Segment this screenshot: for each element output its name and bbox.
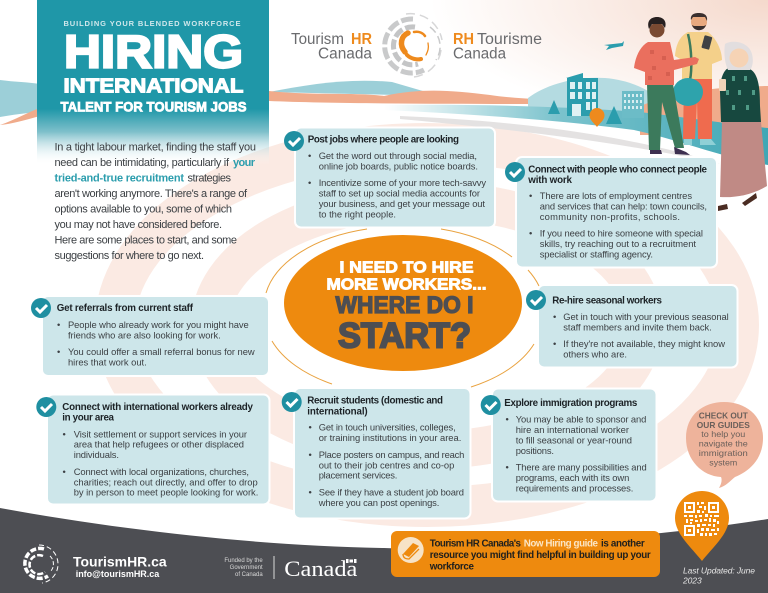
panel: recruit students: Place posters on campus, and reach xyxy=(319,449,464,460)
logo: Tourism HR Canada: Canada xyxy=(318,46,372,63)
callout: check out our guides: navigate the xyxy=(699,438,748,448)
callout: check out our guides: immigration xyxy=(699,448,748,458)
intro paragraph: need can be intimidating, particularly if xyxy=(54,157,230,169)
panel: re-hire seasonal workers xyxy=(526,285,738,368)
header kicker: BUILDING YOUR BLENDED WORKFORCE xyxy=(64,19,240,28)
panel: connect with people: There are lots of employment centres xyxy=(540,190,692,201)
icon: check xyxy=(481,395,501,415)
panel: explore immigration: • xyxy=(506,414,509,425)
panel: referrals: People who already work for you might have xyxy=(68,319,249,330)
callout: check out our guides xyxy=(686,402,763,488)
panel: recruit students: • xyxy=(308,449,312,460)
panel: referrals: You could offer a small referral bonus for new xyxy=(68,346,255,357)
central oval: START? xyxy=(338,316,471,356)
panel: explore immigration xyxy=(481,388,656,502)
icon: check xyxy=(526,290,546,310)
panel: post jobs: to the right people. xyxy=(319,208,396,220)
banner: now hiring guide: is another xyxy=(601,538,645,550)
panel: post jobs: online job boards, public notice boards. xyxy=(319,160,478,172)
panel: connect with people: community non-profits, schools. xyxy=(540,211,680,222)
last updated note: Last Updated: June xyxy=(683,566,755,576)
icon: white logo mark xyxy=(25,545,58,583)
panel: connect with people: specialist or staffing agency. xyxy=(540,249,653,260)
panel: post jobs: Incentivize some of your more tech-savvy xyxy=(319,177,486,188)
footer band xyxy=(0,508,768,593)
panel: explore immigration: requirements and processes. xyxy=(516,483,633,494)
panel: recruit students: See if they have a student job board xyxy=(319,487,464,498)
panel: explore immigration: programs, each with its own xyxy=(516,472,629,483)
icon: check xyxy=(505,162,525,182)
panel: referrals xyxy=(31,296,269,376)
icon: teal building xyxy=(566,73,598,116)
panel: post jobs: staff to set up social media accounts for xyxy=(319,188,480,198)
icon: check xyxy=(31,298,51,318)
central question: I NEED TO HIRE xyxy=(340,260,474,276)
panel: re-hire seasonal workers: If they're not available, they might know xyxy=(563,338,725,349)
intro paragraph: tried-and-true recruitment xyxy=(54,172,184,184)
footer logo and contact xyxy=(25,545,167,583)
panel: connect with people xyxy=(505,157,717,268)
panel: explore immigration: Explore immigration programs xyxy=(504,398,638,409)
panel: post jobs: your business, and get your message out xyxy=(319,198,485,209)
logo: Tourism HR Canada: HR xyxy=(351,31,372,48)
panel: connect with people: skills, try reaching out to a recruitment xyxy=(540,238,696,249)
panel: recruit students: Recruit students (domestic and xyxy=(307,396,443,406)
footer logo and contact: info@tourismHR.ca xyxy=(76,569,160,579)
panel: explore immigration: positions. xyxy=(516,445,554,456)
panel: recruit students: Get in touch universities, colleges, xyxy=(319,422,456,433)
footer logo and contact: TourismHR.ca xyxy=(73,554,167,570)
panel: post jobs: Get the word out through social media, xyxy=(319,150,477,161)
panel: connect with people: • xyxy=(529,190,532,201)
panel: recruit students: where you can post openings. xyxy=(318,497,439,508)
connector ring around central oval xyxy=(266,229,539,387)
panel: international workers: by in person to meet people looking for work. xyxy=(74,487,258,498)
panel: connect with people: • xyxy=(529,228,532,239)
logo: Tourism HR Canada: RH xyxy=(453,31,474,48)
icon: light building xyxy=(622,91,644,118)
government of Canada wordmark xyxy=(224,556,358,581)
intro paragraph xyxy=(54,142,256,262)
title xyxy=(60,26,246,114)
panel: referrals: hires that work out. xyxy=(68,356,147,367)
panel: explore immigration: • xyxy=(506,462,509,473)
panel: connect with people: Connect with people who connect people xyxy=(528,164,708,176)
icon: book xyxy=(398,537,424,563)
logo: Tourism HR Canada: Tourisme xyxy=(477,31,542,48)
panel: international workers: • xyxy=(62,428,66,439)
panel: international workers xyxy=(36,394,269,504)
icon: check xyxy=(284,131,304,151)
panel: post jobs: Post jobs where people are looking xyxy=(308,134,459,146)
panel: explore immigration: hire an international worker xyxy=(516,424,629,435)
panel: referrals: • xyxy=(57,346,60,357)
icon: check xyxy=(282,392,302,412)
central oval: WHERE DO I xyxy=(336,292,474,319)
government of Canada wordmark: Canada xyxy=(284,556,358,581)
intro paragraph: In a tight labour market, finding the staff you xyxy=(54,142,256,154)
panel: referrals: Get referrals from current staff xyxy=(57,303,194,314)
title: INTERNATIONAL xyxy=(64,74,244,98)
intro paragraph: options available to you, some of which xyxy=(54,204,232,216)
intro paragraph: strategies xyxy=(188,172,232,184)
panel: re-hire seasonal workers: others who are. xyxy=(563,348,627,360)
panel: re-hire seasonal workers: • xyxy=(553,311,556,322)
panel: recruit students: • xyxy=(308,422,312,433)
panel: international workers: • xyxy=(62,466,66,477)
intro paragraph: your xyxy=(233,157,256,169)
callout: check out our guides: OUR GUIDES xyxy=(697,420,750,430)
illustration: woman in coral sweater xyxy=(634,17,699,155)
icon: check xyxy=(36,397,56,417)
panel: international workers: area that help refugees or other displaced xyxy=(74,439,244,450)
central oval xyxy=(284,235,522,371)
QR pin xyxy=(675,491,729,561)
government of Canada wordmark: Government xyxy=(230,565,263,571)
banner: now hiring guide xyxy=(391,531,660,577)
last updated note xyxy=(682,566,755,586)
QR code xyxy=(684,502,719,536)
title: HIRING xyxy=(64,26,243,78)
callout: check out our guides: to help you xyxy=(701,429,746,439)
logo: Tourism HR Canada xyxy=(291,14,542,77)
last updated note: 2023 xyxy=(682,576,702,586)
panel: re-hire seasonal workers: Re-hire seasonal workers xyxy=(552,296,663,306)
panel: connect with people: If you need to hire someone with special xyxy=(540,228,703,239)
icon: location pin xyxy=(590,108,604,127)
panel: recruit students: • xyxy=(308,487,312,498)
background sky and rings xyxy=(115,0,768,507)
panel: post jobs: • xyxy=(308,150,311,161)
logo: Tourism HR Canada: Tourism xyxy=(291,31,344,48)
landscape waves xyxy=(0,78,768,165)
panel: post jobs xyxy=(284,128,495,228)
government of Canada wordmark: of Canada xyxy=(235,572,263,578)
logo: Tourism HR Canada: Canada xyxy=(453,46,506,63)
panel: recruit students: or training institutions in your area. xyxy=(319,432,461,443)
intro paragraph: Here are some places to start, and some xyxy=(54,234,237,246)
logo mark xyxy=(385,14,442,77)
banner: now hiring guide: Now Hiring guide xyxy=(524,538,599,550)
illustration: man xyxy=(673,13,722,145)
panel: recruit students xyxy=(282,388,470,518)
panel: referrals: • xyxy=(57,319,60,330)
panel: re-hire seasonal workers: Get in touch with your previous seasonal xyxy=(563,311,729,322)
banner: now hiring guide: resource you might find helpful in building up your xyxy=(430,550,651,561)
panel: recruit students: placement services. xyxy=(319,470,397,481)
panel: connect with people: and services that can help: town councils, xyxy=(540,201,707,212)
panel: re-hire seasonal workers: • xyxy=(553,338,556,349)
panel: international workers: in your area xyxy=(62,412,115,423)
callout: check out our guides: CHECK OUT xyxy=(699,410,749,420)
intro paragraph: suggestions for where to go next. xyxy=(54,250,204,262)
panel: international workers: Visit settlement or support services in your xyxy=(74,428,247,439)
panel: post jobs: • xyxy=(308,177,311,188)
panel: recruit students: out to their job centres and co-op xyxy=(319,459,454,470)
illustration: older woman xyxy=(718,42,767,211)
panel: explore immigration: You may be able to sponsor and xyxy=(516,414,646,425)
icon: trees xyxy=(548,100,622,124)
panel: referrals: friends who are also looking for work. xyxy=(68,329,221,340)
central oval: MORE WORKERS... xyxy=(326,276,486,294)
panel: international workers: Connect with local organizations, churches, xyxy=(74,466,249,477)
panel: recruit students: international) xyxy=(307,406,368,418)
title: TALENT FOR TOURISM JOBS xyxy=(60,98,246,114)
callout: check out our guides: system xyxy=(709,458,737,468)
government of Canada wordmark: Funded by the xyxy=(224,558,263,564)
banner: now hiring guide: Tourism HR Canada's xyxy=(430,538,522,550)
icon: plane xyxy=(604,41,624,50)
panel: explore immigration: There are many possibilities and xyxy=(516,462,647,473)
city illustration xyxy=(548,73,644,127)
header panel xyxy=(37,0,269,165)
panel: international workers: charities; reach out directly, and offer to drop xyxy=(74,476,258,487)
intro paragraph: you may not have considered before. xyxy=(54,219,222,231)
panel: international workers: Connect with international workers already xyxy=(62,402,254,413)
panel: international workers: individuals. xyxy=(74,449,119,460)
intro paragraph: aren't working anymore. There's a range of xyxy=(54,188,248,200)
panel: connect with people: with work xyxy=(527,175,573,186)
panel: explore immigration: to fill seasonal or year-round xyxy=(516,434,632,445)
banner: now hiring guide: workforce xyxy=(429,562,475,572)
panel: re-hire seasonal workers: staff members and invite them back. xyxy=(563,321,712,332)
